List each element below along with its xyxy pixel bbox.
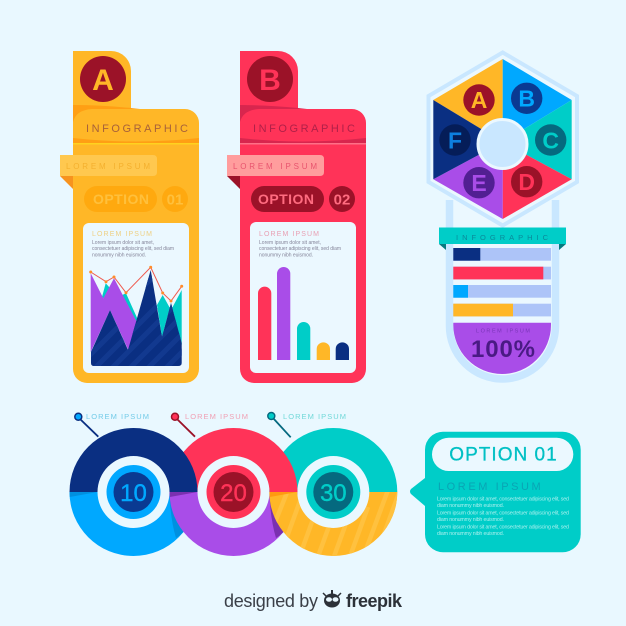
callout body text: diam nonummy nibh euismod. — [437, 531, 504, 537]
value badge 30: 30 — [320, 480, 347, 507]
hexagon sectors — [433, 59, 572, 219]
chart navy mountains — [91, 270, 182, 366]
badge: 02: 02 — [334, 192, 350, 208]
text block A: LOREM IPSUM — [92, 231, 152, 238]
ring bottoms — [70, 492, 398, 556]
pill: option: OPTION — [93, 191, 149, 207]
ribbon: lorem ipsum — [227, 155, 324, 189]
pin label 3 — [268, 412, 346, 437]
text block A — [92, 231, 174, 258]
panel: card A — [60, 51, 199, 383]
pin label 1 — [75, 412, 149, 437]
progress bars — [453, 248, 551, 316]
infographic canvas — [60, 50, 581, 611]
badge B — [247, 56, 293, 102]
callout body text: diam nonummy nibh euismod. — [437, 517, 504, 523]
text block B: LOREM IPSUM — [259, 231, 319, 238]
value badge 20 — [206, 465, 260, 519]
ring tops — [70, 428, 397, 492]
badge: B — [511, 83, 542, 114]
footer credit: designed by — [224, 591, 318, 611]
badge: D: D — [518, 169, 535, 195]
panel: option callout — [410, 432, 581, 552]
text block A: Lorem ipsum dolor sit amet, — [92, 240, 154, 246]
text block B — [259, 231, 341, 258]
card A body — [73, 51, 199, 383]
callout body text: Lorem ipsum dolor sit amet, consectetuer adipiscing elit, sed — [437, 496, 569, 502]
heading: infographic: INFOGRAPHIC — [253, 123, 355, 135]
badge B: B — [259, 64, 281, 97]
badge: A — [463, 84, 495, 116]
inner panel B — [250, 222, 356, 373]
ribbon: lorem ipsum — [60, 155, 157, 189]
chart line — [89, 266, 183, 302]
pill: option: OPTION — [258, 191, 314, 207]
pill: option — [84, 186, 157, 212]
footer credit — [224, 590, 403, 611]
callout title pill: OPTION 01 — [449, 445, 557, 466]
shield outline with posts — [450, 200, 556, 379]
card A header band shading — [73, 105, 199, 144]
text block B: consectetuer adipiscing elit, sed diam — [259, 246, 341, 252]
pin label 2 — [172, 412, 248, 437]
pin label 3: LOREM IPSUM — [283, 412, 346, 421]
icon: freepik logo — [323, 590, 341, 608]
badge: C — [535, 124, 566, 156]
badge: F — [439, 124, 471, 156]
inner panel A — [83, 223, 189, 373]
value badge 10 — [106, 465, 160, 519]
badge: F: F — [448, 127, 462, 153]
purple gauge 100%: LOREM IPSUM — [476, 328, 530, 334]
badge: 01: 01 — [167, 192, 183, 208]
badge: E: E — [471, 170, 487, 196]
value badge 20: 20 — [220, 480, 247, 507]
purple gauge 100%: 100% — [471, 336, 535, 363]
badge: 01 — [162, 186, 188, 212]
pill: option — [251, 186, 324, 212]
badge A: A — [92, 64, 114, 97]
callout title pill — [432, 438, 573, 471]
teal ribbon: INFOGRAPHIC — [456, 233, 549, 242]
badge A — [80, 56, 126, 102]
hexagon centre circle — [478, 120, 527, 168]
card B body — [240, 51, 366, 383]
badge: E — [463, 167, 495, 198]
purple gauge 100% — [453, 323, 551, 374]
teal ribbon — [439, 228, 566, 250]
value badge 10: 10 — [120, 480, 147, 507]
callout body text: Lorem ipsum dolor sit amet, consectetuer adipiscing elit, sed — [437, 525, 569, 531]
badge: C: C — [542, 128, 559, 154]
text block A: nonummy nibh euismod. — [92, 252, 146, 258]
footer credit: freepik — [346, 591, 403, 611]
text block A: consectetuer adipiscing elit, sed diam — [92, 246, 174, 252]
bar chart — [258, 267, 349, 360]
heading: infographic: INFOGRAPHIC — [86, 123, 188, 135]
badge: 02 — [329, 186, 355, 212]
card B header band shading — [240, 105, 366, 144]
area chart with line — [89, 266, 184, 366]
callout pointer — [410, 478, 425, 506]
pin label 2: LOREM IPSUM — [185, 412, 248, 421]
panel: three linked rings — [70, 412, 400, 562]
text block B: nonummy nibh euismod. — [259, 252, 313, 258]
badge: A: A — [471, 87, 487, 113]
ribbon: lorem ipsum: LOREM IPSUM — [233, 162, 317, 171]
ribbon: lorem ipsum: LOREM IPSUM — [66, 162, 150, 171]
badge: D — [511, 166, 542, 197]
panel: card B — [227, 51, 366, 383]
callout body text — [437, 496, 569, 537]
callout body — [425, 432, 581, 552]
value badge 30 — [306, 465, 360, 519]
badge: B: B — [518, 86, 535, 112]
callout body text: Lorem ipsum dolor sit amet, consectetuer adipiscing elit, sed — [437, 511, 569, 517]
callout body text: diam nonummy nibh euismod. — [437, 503, 504, 509]
hexagon frame — [428, 52, 577, 226]
callout subheading: LOREM IPSUM — [438, 481, 541, 493]
panel: hexagon and shield — [428, 52, 577, 379]
pin label 1: LOREM IPSUM — [86, 412, 149, 421]
text block B: Lorem ipsum dolor sit amet, — [259, 240, 321, 246]
